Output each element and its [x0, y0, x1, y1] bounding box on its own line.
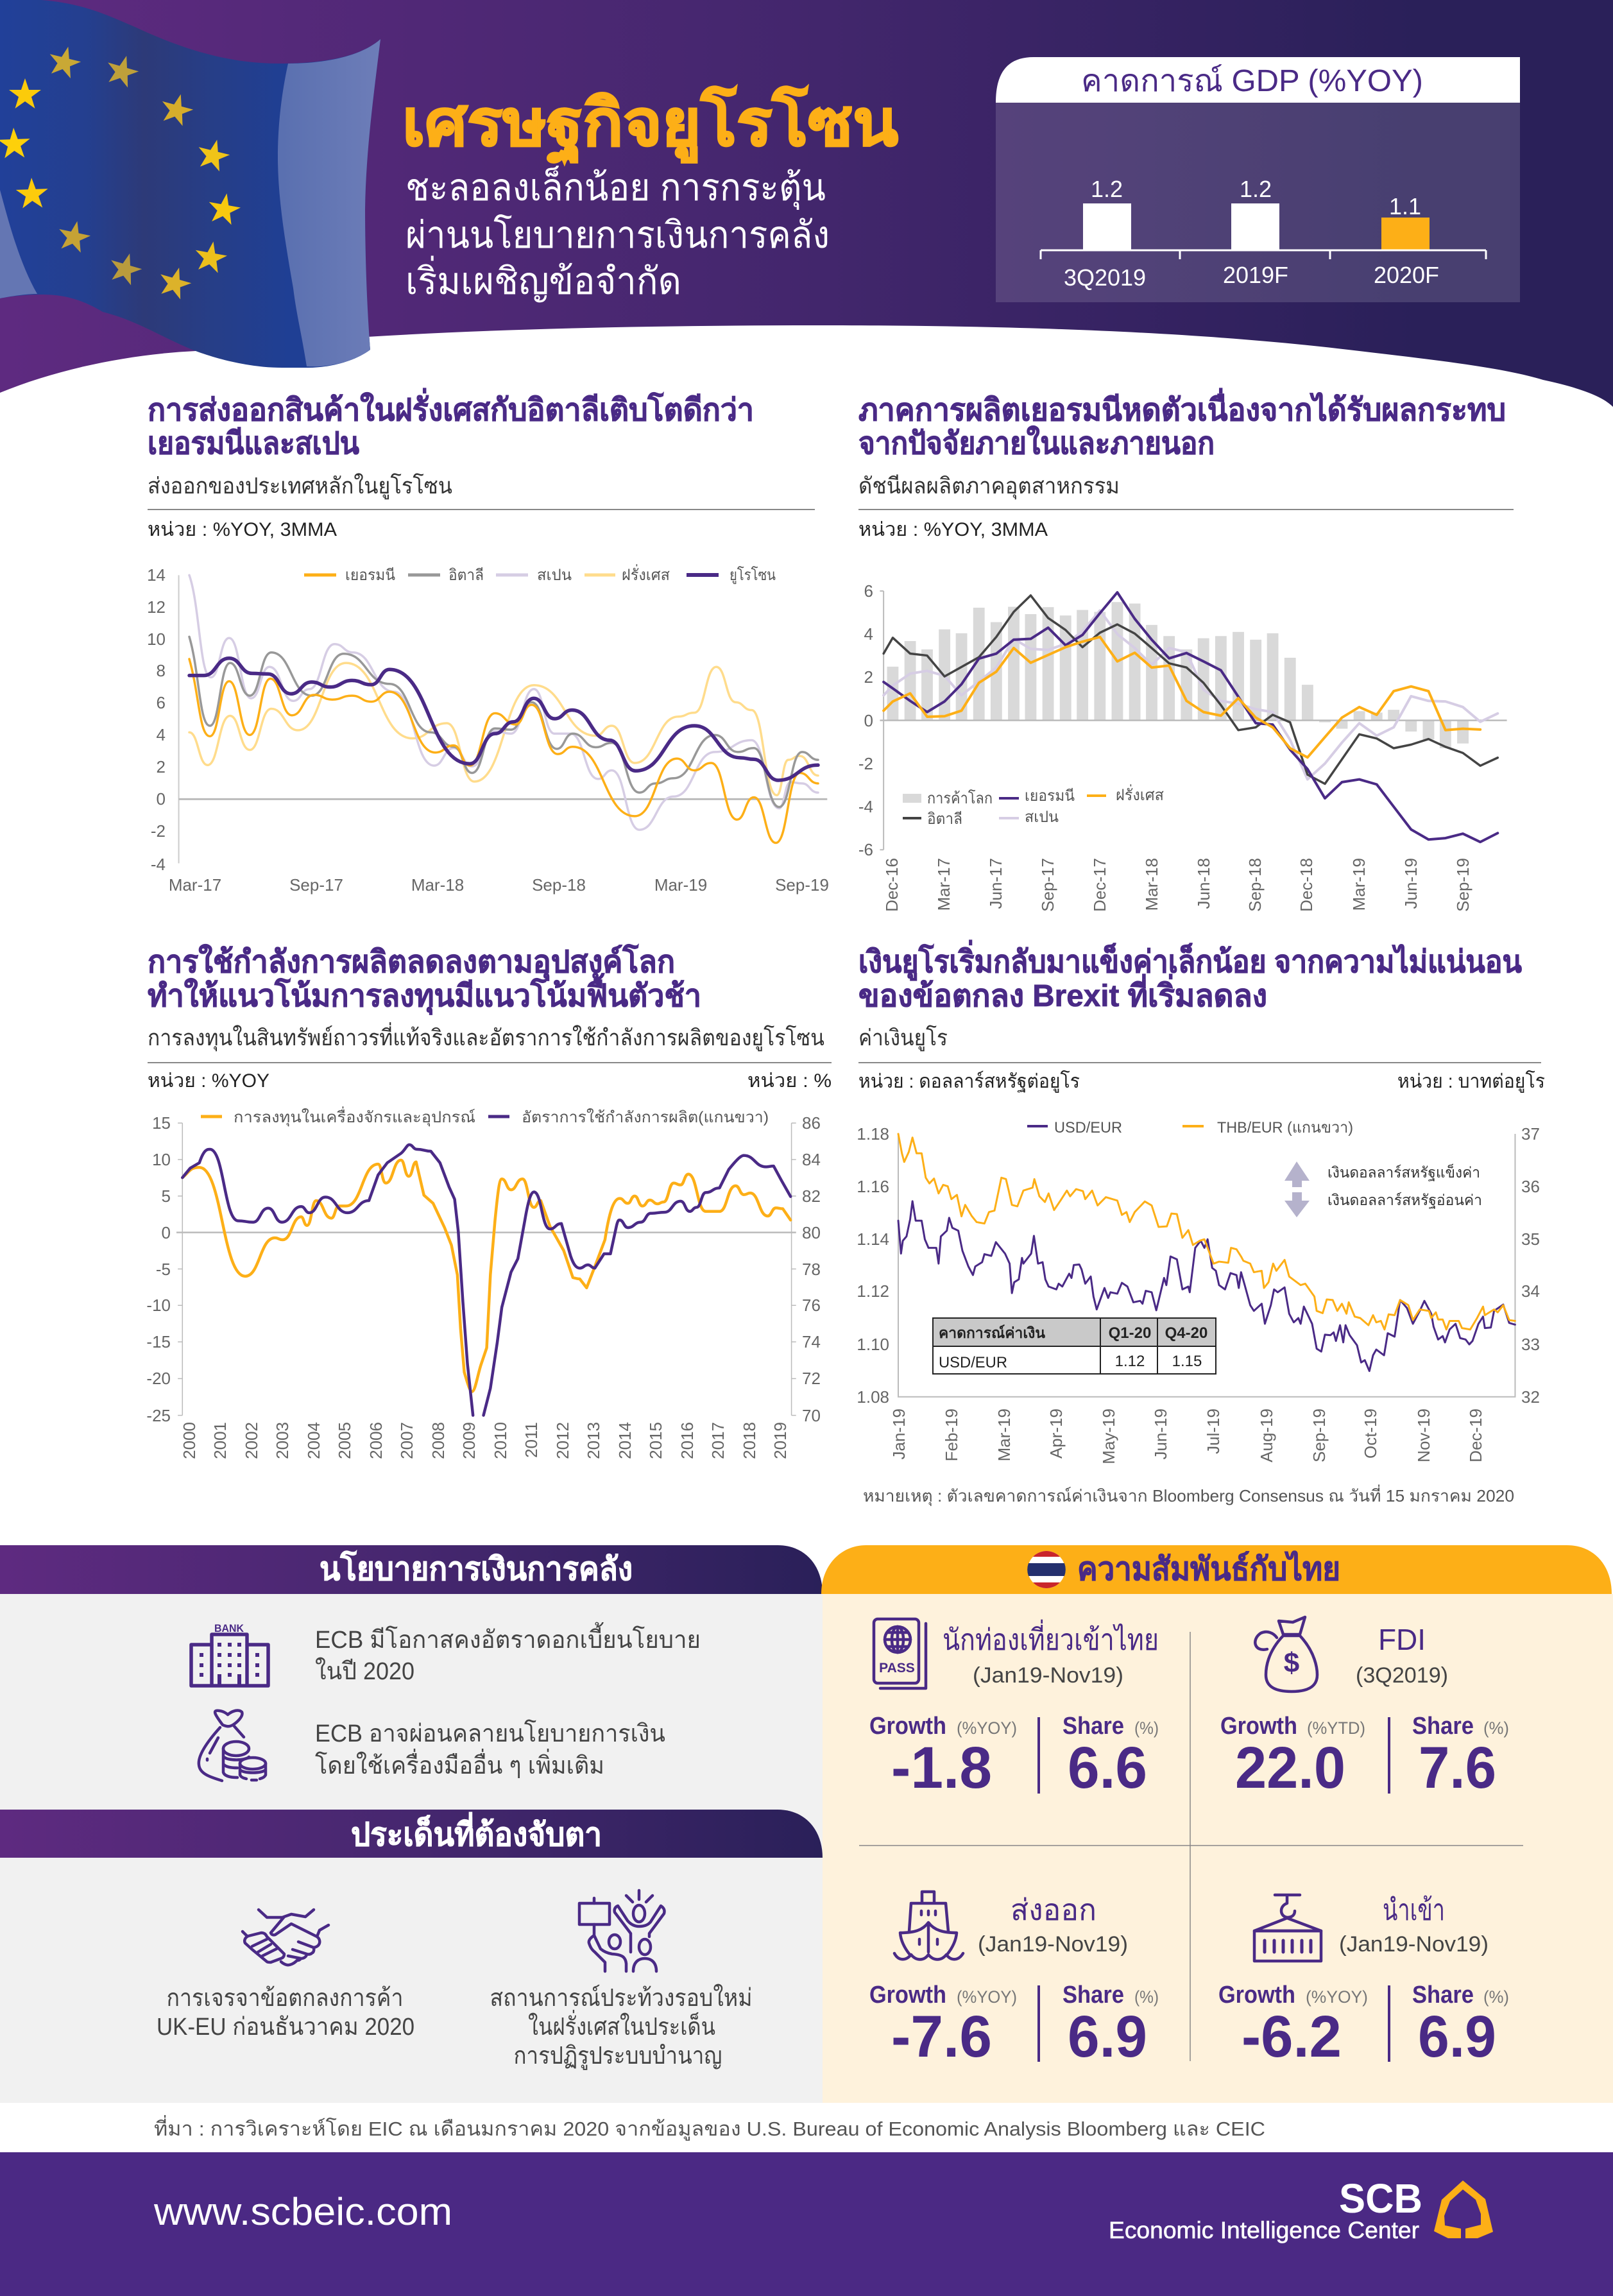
line chart: investment and capacity: 2018: [740, 1422, 759, 1459]
icon: protest: [579, 1890, 664, 1971]
bar chart: GDP: 2020F: [1374, 262, 1439, 288]
subtitle: ชะลอลงเล็กน้อย การกระตุ้น: [405, 166, 826, 210]
stat: FDI: (%): [1483, 1718, 1509, 1738]
legend: [903, 784, 1164, 828]
stat: imports: -6.2: [1242, 2004, 1342, 2069]
unit label: หน่วย : %YOY, 3MMA: [148, 519, 337, 540]
line chart: investment and capacity: 78: [802, 1260, 821, 1279]
panel: manufacturing chart: [858, 388, 1514, 912]
website: www.scbeic.com: [153, 2190, 452, 2233]
icon: passport: [874, 1619, 926, 1688]
line chart: investment and capacity: -15: [146, 1332, 171, 1351]
stat: tourists: 6.6: [1068, 1735, 1147, 1801]
unit labels: หน่วย : %YOY: [148, 1070, 269, 1092]
heading: Thailand: ความสัมพันธ์กับไทย: [1077, 1550, 1340, 1587]
stat: exports: Share: [1063, 1982, 1124, 2009]
table: currency forecast: คาดการณ์ค่าเงิน: [939, 1324, 1045, 1341]
panel: monetary and fiscal policy: [0, 1545, 823, 2103]
stat: exports: 6.9: [1068, 2004, 1147, 2069]
table: currency forecast: 1.15: [1172, 1353, 1202, 1370]
line chart: exports: 10: [147, 630, 166, 649]
legend: [201, 1106, 769, 1127]
panel: issues to watch: [0, 1810, 823, 2070]
legend: อัตราการใช้กำลังการผลิต(แกนขวา): [522, 1108, 769, 1126]
line chart: exports: 6: [157, 693, 166, 712]
stat: FDI: 7.6: [1419, 1735, 1496, 1801]
heading: [858, 388, 1506, 461]
line chart: investment and capacity: 5: [162, 1187, 171, 1206]
stat: tourists: นักท่องเที่ยวเข้าไทย: [943, 1619, 1159, 1656]
legend: THB/EUR (แกนขวา): [1217, 1119, 1353, 1136]
subtitle: [405, 166, 830, 302]
line chart: investment and capacity: 15: [152, 1113, 171, 1133]
stat: FDI: FDI: [1378, 1623, 1426, 1656]
table: currency forecast: Q4-20: [1165, 1324, 1208, 1342]
heading: watch: [0, 1810, 823, 1858]
line chart: investment and capacity: 0: [162, 1223, 171, 1242]
heading: GDP forecast: คาดการณ์ GDP (%YOY): [1081, 64, 1423, 98]
line chart: USD/EUR and THB/EUR: 32: [1521, 1387, 1540, 1407]
bar chart: GDP: 1.2: [1091, 176, 1123, 202]
subheading: ค่าเงินยูโร: [858, 1025, 948, 1051]
text: ECB easing: [315, 1719, 665, 1779]
icon: passport: PASS: [879, 1661, 915, 1675]
line chart: investment and capacity: 2002: [242, 1422, 261, 1459]
bar chart: GDP: 1.2: [1240, 176, 1272, 202]
panel: GDP forecast: [996, 57, 1520, 302]
table: currency forecast: USD/EUR: [939, 1354, 1007, 1371]
subheading: การลงทุนในสินทรัพย์ถาวรที่แท้จริงและอัตราการใช้กำลังการผลิตของยูโรโซน: [148, 1022, 824, 1051]
stat: imports: Share: [1412, 1982, 1474, 2009]
stat: exports: (%YOY): [957, 1987, 1017, 2007]
line chart: exports: Sep-19: [775, 875, 829, 895]
line chart: USD/EUR and THB/EUR: Oct-19: [1361, 1409, 1380, 1459]
icon: handshake: [243, 1910, 329, 1965]
line chart: investment and capacity: 2009: [459, 1422, 479, 1459]
line chart: USD/EUR and THB/EUR: 1.16: [857, 1177, 889, 1196]
line chart: USD/EUR and THB/EUR: 37: [1521, 1124, 1540, 1144]
combo chart: industrial production: Mar-17: [934, 858, 953, 911]
line chart: USD/EUR and THB/EUR: May-19: [1099, 1409, 1118, 1464]
legend: [304, 564, 776, 585]
line chart: USD/EUR and THB/EUR: 1.18: [857, 1124, 889, 1144]
stat: tourists: Share: [1063, 1713, 1124, 1740]
stat: exports: -7.6: [891, 2004, 992, 2069]
title: เศรษฐกิจยูโรโซน: [402, 85, 898, 165]
line chart: exports: 12: [147, 597, 166, 617]
stat: tourists: (%): [1134, 1718, 1159, 1738]
heading: [858, 939, 1522, 1013]
heading: การใช้กำลังการผลิตลดลงตามอุปสงค์โลก: [148, 943, 675, 981]
line chart: USD/EUR and THB/EUR: Jul-19: [1204, 1409, 1223, 1454]
stat: imports: นำเข้า: [1383, 1893, 1445, 1926]
stat: exports: Growth: [869, 1982, 946, 2009]
unit labels: หน่วย : %: [747, 1070, 832, 1092]
line chart: exports: Mar-18: [411, 875, 464, 895]
heading: เงินยูโรเริ่มกลับมาแข็งค่าเล็กน้อย จากความไม่แน่นอน: [858, 939, 1522, 981]
line chart: investment and capacity: 2011: [522, 1422, 541, 1458]
heading: watch: ประเด็นที่ต้องจับตา: [351, 1812, 602, 1853]
text: UK-EU: การเจรจาข้อตกลงการค้า: [167, 1985, 403, 2012]
unit labels: [858, 1070, 1545, 1093]
unit label: หน่วย : %YOY, 3MMA: [858, 519, 1048, 540]
line chart: USD/EUR and THB/EUR: 1.14: [857, 1229, 889, 1249]
combo chart: industrial production: Jun-19: [1401, 858, 1421, 909]
line chart: investment and capacity: 76: [802, 1296, 821, 1315]
combo chart: industrial production: Jun-18: [1194, 858, 1213, 909]
line chart: exports: 0: [157, 789, 166, 809]
stat: imports: (%YOY): [1306, 1987, 1368, 2007]
line chart: investment and capacity: 2008: [429, 1422, 448, 1459]
line chart: investment and capacity: -10: [146, 1296, 171, 1315]
line chart: USD/EUR and THB/EUR: Jan-19: [889, 1409, 909, 1459]
stat: tourists: [869, 1619, 1159, 1801]
combo chart: industrial production: Dec-18: [1297, 858, 1316, 912]
line chart: USD/EUR and THB/EUR: Dec-19: [1466, 1409, 1485, 1462]
combo chart: industrial production: 0: [864, 711, 873, 730]
source note: ที่มา : การวิเคราะห์โดย EIC ณ เดือนมกราคม 2020 จากข้อมูลของ U.S. Bureau of Economic Analysis Bloomberg และ CEIC: [154, 2115, 1265, 2141]
line chart: exports: -2: [151, 821, 166, 841]
line chart: USD/EUR and THB/EUR: 1.10: [857, 1335, 889, 1354]
unit labels: หน่วย : บาทต่อยูโร: [1397, 1070, 1545, 1093]
line chart: investment and capacity: 72: [802, 1369, 821, 1388]
stat: FDI: [1220, 1617, 1509, 1801]
arrow: dollar weakening: [1284, 1192, 1482, 1217]
line chart: investment and capacity: 2000: [180, 1422, 199, 1459]
line chart: investment and capacity: 2004: [304, 1422, 323, 1459]
stat: exports: (Jan19-Nov19): [978, 1932, 1128, 1957]
text: UK-EU: UK-EU ก่อนธันวาคม 2020: [157, 2014, 414, 2041]
legend: USD/EUR: [1054, 1119, 1122, 1136]
bar chart: GDP: 3Q2019: [1064, 264, 1146, 291]
legend: ฝรั่งเศส: [1116, 784, 1164, 804]
line chart: USD/EUR and THB/EUR: Sep-19: [1310, 1409, 1329, 1462]
text: UK-EU: [157, 1985, 414, 2041]
line chart: exports: 8: [157, 661, 166, 680]
legend: สเปน: [1025, 809, 1059, 826]
combo chart: industrial production: Sep-17: [1038, 858, 1057, 912]
heading: policy: [0, 1545, 823, 1594]
line chart: investment and capacity: 80: [802, 1223, 821, 1242]
text: ECB rate: ECB มีโอกาสคงอัตราดอกเบี้ยนโยบาย: [315, 1622, 701, 1654]
line chart: USD/EUR and THB/EUR: 33: [1521, 1335, 1540, 1354]
line chart: investment and capacity: 84: [802, 1150, 821, 1169]
legend: การค้าโลก: [927, 789, 993, 807]
heading: ของข้อตกลง Brexit ที่เริ่มลดลง: [858, 973, 1267, 1013]
legend: เยอรมนี: [345, 567, 395, 584]
bar chart: GDP: 2019F: [1223, 262, 1288, 288]
legend: [1027, 1119, 1353, 1136]
icon: EU flag: [0, 0, 380, 368]
line chart: investment and capacity: 74: [802, 1332, 821, 1351]
arrow: dollar strengthening: [1284, 1161, 1480, 1187]
stat: tourists: -1.8: [891, 1735, 992, 1801]
logo: SCB: Economic Intelligence Center: [1109, 2217, 1419, 2243]
heading: [148, 388, 754, 461]
legend: สเปน: [537, 567, 572, 584]
panel: exports chart: [147, 388, 829, 895]
text: ECB rate: ในปี 2020: [315, 1658, 414, 1685]
panel: investment chart: [146, 943, 832, 1459]
combo chart: industrial production: Dec-16: [882, 858, 901, 912]
stat: exports: (%): [1134, 1987, 1159, 2007]
combo chart: industrial production: 2: [864, 667, 873, 687]
legend: อิตาลี: [448, 567, 484, 584]
line chart: investment and capacity: [146, 1106, 821, 1459]
combo chart: industrial production: 4: [864, 624, 873, 644]
combo chart: industrial production: Jun-17: [986, 858, 1005, 909]
combo chart: industrial production: -4: [858, 797, 873, 816]
line chart: investment and capacity: 2006: [366, 1422, 386, 1459]
heading: เยอรมนีและสเปน: [148, 427, 359, 461]
combo chart: industrial production: Mar-19: [1349, 858, 1369, 911]
text: France protest: สถานการณ์ประท้วงรอบใหม่: [490, 1984, 752, 2012]
line chart: investment and capacity: 2019: [771, 1422, 790, 1459]
line chart: USD/EUR and THB/EUR: Aug-19: [1257, 1409, 1276, 1462]
legend: การลงทุนในเครื่องจักรและอุปกรณ์: [234, 1106, 475, 1127]
logo: SCB: [1109, 2175, 1493, 2243]
line chart: investment and capacity: 2013: [584, 1422, 603, 1459]
stat: FDI: (3Q2019): [1356, 1663, 1448, 1688]
stat: imports: (%): [1483, 1987, 1509, 2007]
subtitle: เริ่มเผชิญข้อจำกัด: [405, 255, 681, 302]
text: ECB easing: โดยใช้เครื่องมืออื่น ๆ เพิ่มเติม: [315, 1749, 604, 1779]
line chart: USD/EUR and THB/EUR: 1.12: [857, 1281, 889, 1301]
text: France protest: ในฝรั่งเศสในประเด็น: [528, 2010, 715, 2041]
line chart: USD/EUR and THB/EUR: 36: [1521, 1177, 1540, 1196]
combo chart: industrial production: Dec-17: [1090, 858, 1109, 912]
line chart: investment and capacity: -25: [146, 1406, 171, 1425]
line chart: investment and capacity: 2003: [273, 1422, 292, 1459]
subtitle: ผ่านนโยบายการเงินการคลัง: [405, 214, 830, 256]
line chart: investment and capacity: 2001: [210, 1422, 230, 1459]
stat: exports: ส่งออก: [1011, 1893, 1097, 1926]
line chart: investment and capacity: 2015: [646, 1422, 665, 1459]
text: ECB rate: [315, 1622, 701, 1685]
stat: tourists: (%YOY): [957, 1718, 1017, 1738]
footnote: หมายเหตุ : ตัวเลขคาดการณ์ค่าเงินจาก Bloomberg Consensus ณ วันที่ 15 มกราคม 2020: [863, 1484, 1514, 1506]
arrow: dollar weakening: เงินดอลลาร์สหรัฐอ่อนค่า: [1327, 1192, 1482, 1209]
line chart: investment and capacity: -5: [156, 1260, 171, 1279]
text: France protest: [490, 1984, 752, 2070]
unit labels: หน่วย : ดอลลาร์สหรัฐต่อยูโร: [858, 1070, 1080, 1093]
logo: SCB: SCB: [1339, 2175, 1422, 2222]
stat: imports: 6.9: [1418, 2004, 1496, 2069]
table: currency forecast: 1.12: [1115, 1353, 1145, 1370]
line chart: exports: [147, 564, 829, 895]
line chart: USD/EUR and THB/EUR: 1.08: [857, 1387, 889, 1407]
stat: FDI: Share: [1412, 1713, 1474, 1740]
line chart: investment and capacity: 86: [802, 1113, 821, 1133]
icon: ship: [894, 1892, 963, 1960]
stat: imports: (Jan19-Nov19): [1339, 1932, 1489, 1957]
line chart: investment and capacity: 2007: [397, 1422, 416, 1459]
heading: policy: นโยบายการเงินการคลัง: [320, 1550, 633, 1587]
table: currency forecast: Q1-20: [1109, 1324, 1151, 1342]
legend: ยูโรโซน: [730, 566, 776, 585]
line chart: USD/EUR and THB/EUR: Apr-19: [1046, 1409, 1066, 1459]
line chart: investment and capacity: 2010: [491, 1422, 510, 1459]
heading: [148, 943, 701, 1015]
combo chart: industrial production: Sep-18: [1245, 858, 1265, 912]
stat: FDI: 22.0: [1235, 1735, 1345, 1801]
icon: container: [1254, 1895, 1321, 1961]
combo chart: industrial production: -2: [858, 754, 873, 773]
line chart: exports: 2: [157, 757, 166, 776]
icon: bank: BANK: [214, 1622, 244, 1634]
text: ECB easing: ECB อาจผ่อนคลายนโยบายการเงิน: [315, 1719, 665, 1747]
unit labels: [148, 1070, 832, 1092]
stat: tourists: (Jan19-Nov19): [973, 1663, 1123, 1688]
line chart: investment and capacity: 2017: [708, 1422, 728, 1459]
stat: imports: [1218, 1893, 1509, 2069]
icon: dollar bag: $: [1284, 1647, 1299, 1679]
stat: FDI: Growth: [1220, 1713, 1297, 1740]
line chart: investment and capacity: 2014: [615, 1422, 635, 1459]
heading: จากปัจจัยภายในและภายนอก: [858, 425, 1215, 461]
combo chart: industrial production: -6: [858, 840, 873, 859]
line chart: exports: Mar-17: [169, 875, 221, 895]
text: France protest: การปฏิรูประบบบำนาญ: [513, 2043, 722, 2070]
combo chart: industrial production: [858, 581, 1507, 912]
line chart: investment and capacity: 82: [802, 1187, 821, 1206]
line chart: exports: 14: [147, 565, 166, 585]
line chart: USD/EUR and THB/EUR: Jun-19: [1151, 1409, 1170, 1459]
heading: Thailand: [821, 1545, 1612, 1594]
heading: ภาคการผลิตเยอรมนีหดตัวเนื่องจากได้รับผลกระทบ: [858, 388, 1506, 427]
panel: relationship with Thailand: [821, 1545, 1613, 2103]
line chart: USD/EUR and THB/EUR: 34: [1521, 1281, 1540, 1301]
icon: Thai flag: [1027, 1551, 1066, 1588]
combo chart: industrial production: 6: [864, 581, 873, 601]
legend: อิตาลี: [927, 810, 962, 828]
header banner: [0, 0, 1613, 424]
bar chart: GDP: 1.1: [1389, 193, 1421, 219]
stat: exports: [869, 1892, 1159, 2069]
stat: tourists: Growth: [869, 1713, 946, 1740]
combo chart: industrial production: Mar-18: [1142, 858, 1161, 911]
subheading: ส่งออกของประเทศหลักในยูโรโซน: [148, 473, 452, 499]
line chart: exports: -4: [151, 855, 166, 874]
icon: bank: [191, 1622, 268, 1686]
line chart: exports: Sep-17: [289, 875, 343, 895]
line chart: exports: Mar-19: [654, 875, 707, 895]
bar chart: GDP: [1041, 176, 1486, 291]
arrow: dollar strengthening: เงินดอลลาร์สหรัฐแข็งค่า: [1327, 1163, 1480, 1181]
combo chart: industrial production: Sep-19: [1453, 858, 1472, 912]
footer: [0, 2152, 1613, 2296]
line chart: USD/EUR and THB/EUR: [857, 1119, 1540, 1464]
line chart: investment and capacity: 2012: [553, 1422, 572, 1459]
panel: euro currency chart: [857, 939, 1545, 1506]
line chart: exports: Sep-18: [532, 875, 586, 895]
icon: dollar bag: [1255, 1617, 1317, 1692]
table: currency forecast: [933, 1318, 1216, 1374]
stat: FDI: (%YTD): [1307, 1718, 1365, 1738]
icon: money bag with coins: [199, 1710, 266, 1781]
line chart: investment and capacity: -20: [146, 1369, 171, 1388]
legend: เยอรมนี: [1025, 787, 1075, 805]
heading: ทำให้แนวโน้มการลงทุนมีแนวโน้มฟื้นตัวช้า: [148, 973, 701, 1015]
line chart: USD/EUR and THB/EUR: Nov-19: [1414, 1409, 1433, 1462]
legend: ฝรั่งเศส: [622, 564, 670, 584]
line chart: USD/EUR and THB/EUR: Feb-19: [942, 1409, 961, 1461]
stat: imports: Growth: [1218, 1982, 1295, 2009]
heading: การส่งออกสินค้าในฝรั่งเศสกับอิตาลีเติบโตดีกว่า: [148, 388, 754, 427]
line chart: investment and capacity: 2016: [678, 1422, 697, 1459]
line chart: USD/EUR and THB/EUR: 35: [1521, 1229, 1540, 1249]
line chart: investment and capacity: 10: [152, 1150, 171, 1169]
line chart: investment and capacity: 70: [802, 1406, 821, 1425]
line chart: USD/EUR and THB/EUR: Mar-19: [994, 1409, 1014, 1461]
subheading: ดัชนีผลผลิตภาคอุตสาหกรรม: [858, 474, 1120, 499]
line chart: exports: 4: [157, 725, 166, 744]
line chart: investment and capacity: 2005: [335, 1422, 354, 1459]
